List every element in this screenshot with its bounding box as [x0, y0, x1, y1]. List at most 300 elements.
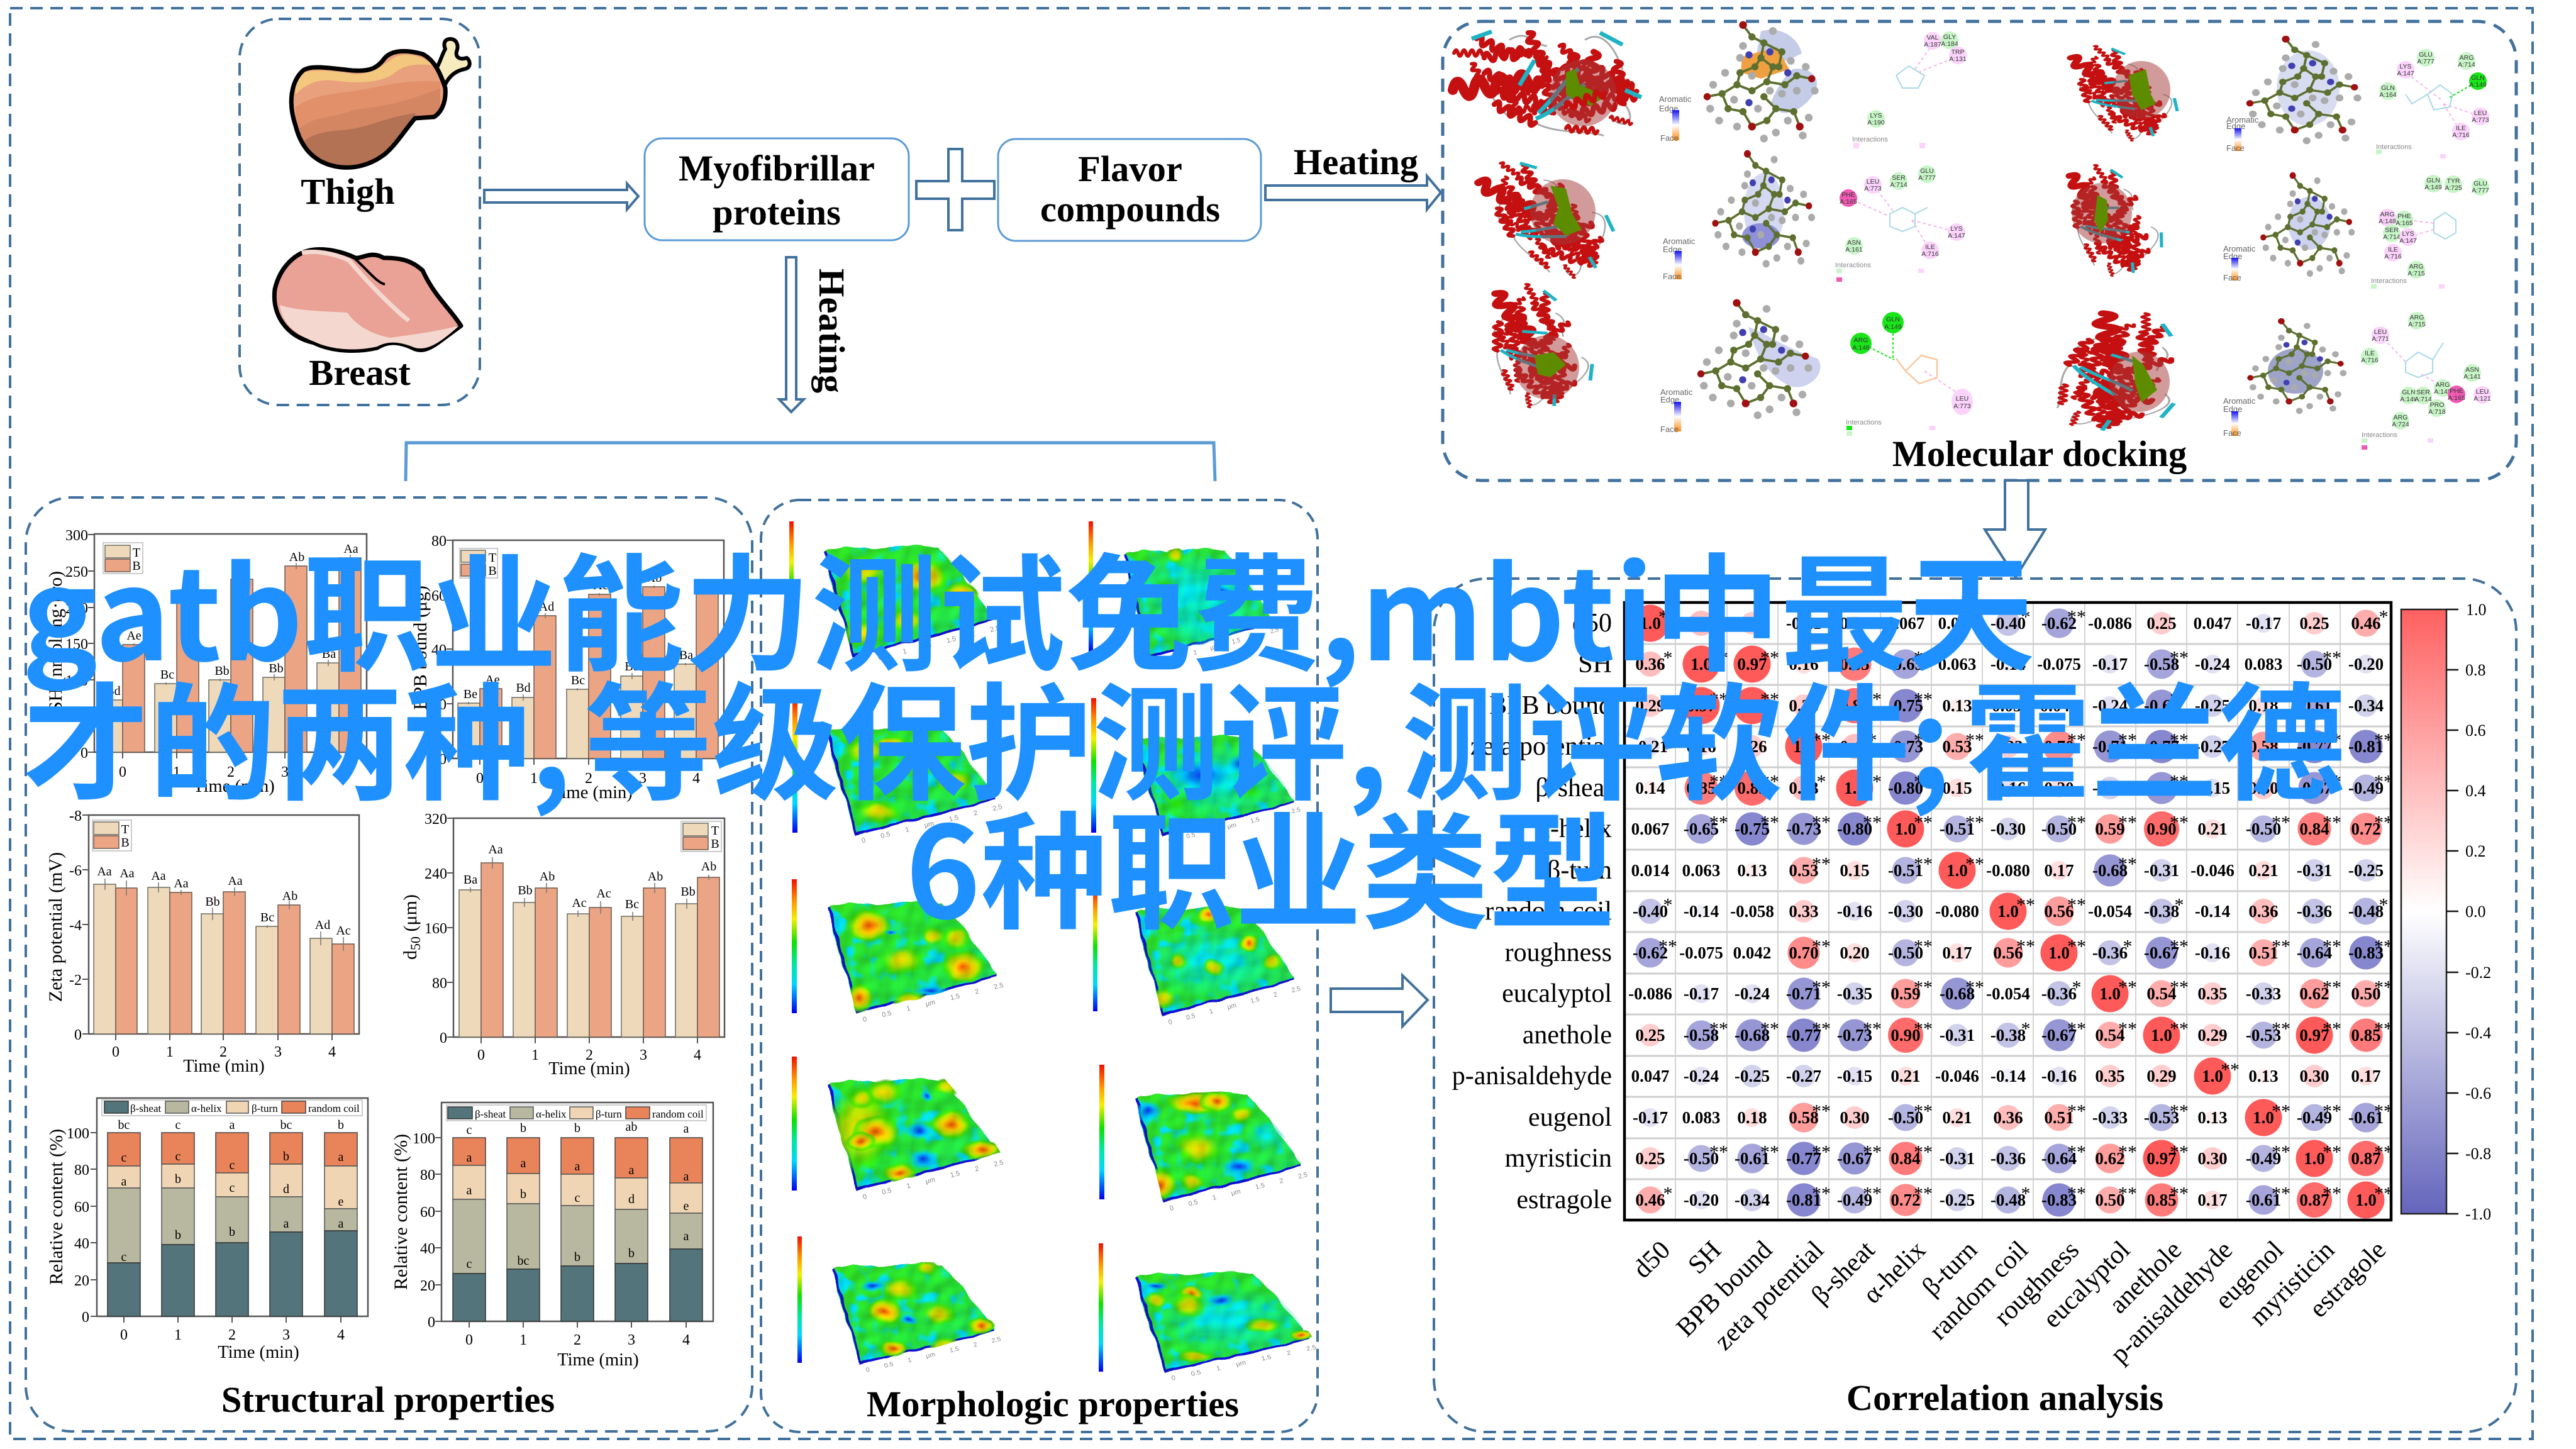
row: myristicin: -0.64 [2041, 1149, 2077, 1168]
chart: secondary structure B: 40 [420, 1241, 435, 1257]
box: flavor compounds: compounds [1040, 189, 1220, 230]
chart: secondary structure T: b [283, 1150, 289, 1163]
chart: BPB bound: B [488, 564, 497, 578]
chart: secondary structure B: a [629, 1163, 635, 1177]
chart: zeta potential [45, 808, 359, 1076]
row: roughness: ** [2170, 936, 2189, 957]
row: myristicin: ** [1760, 1142, 1779, 1162]
row: estragole: -0.34 [1735, 1191, 1770, 1209]
row: roughness: 0.56 [1993, 943, 2023, 962]
row: estragole: ** [2374, 1184, 2393, 1204]
docking complex row 2 left: A:773 [1864, 185, 1882, 192]
row: random coil: -0.48 [2348, 902, 2384, 921]
row: zeta potential: 0.58 [2248, 737, 2279, 756]
row: BPB bound: -0.058 [1986, 696, 2030, 715]
row: zeta potential: -0.77 [2297, 737, 2332, 756]
row: eugenol: eugenol [1528, 1103, 1612, 1132]
chart: secondary structure T: c [121, 1250, 127, 1264]
row: eugenol: ** [2272, 1101, 2290, 1122]
row: eucalyptol: -0.36 [2041, 984, 2077, 1003]
row: random coil: -0.14 [1684, 902, 1719, 921]
docking complex row 3 left: Edge [1660, 395, 1679, 404]
chart: BPB bound: Ae [485, 673, 500, 687]
title: molecular docking: Molecular docking [1892, 433, 2187, 474]
docking complex row 3 right: SER [2416, 389, 2430, 396]
docking complex row 2 right: ARG [2380, 211, 2394, 218]
row: myristicin: 1.0 [2304, 1149, 2325, 1168]
row: BPB bound: 0.042 [2040, 696, 2078, 715]
panel: raw materials [240, 19, 480, 405]
docking complex row 2 right: SER [2385, 226, 2399, 234]
row: roughness: ** [2016, 936, 2035, 957]
docking complex row 3 right: A:771 [2372, 335, 2389, 343]
docking complex row 2 right: GLN [2426, 177, 2440, 184]
row: beta-sheat: ** [2323, 771, 2341, 792]
row: eugenol: 1.0 [2253, 1108, 2274, 1127]
row: anethole: -0.77 [1786, 1026, 1821, 1045]
row: myristicin: ** [2170, 1142, 2189, 1162]
row: alpha-helix: ** [2374, 813, 2393, 833]
row: BPB bound: -0.75 [1888, 696, 1923, 715]
docking complex row 1 right: Face [2226, 143, 2245, 153]
row: estragole: -0.48 [1990, 1191, 2026, 1209]
row: eugenol: ** [2374, 1101, 2393, 1122]
row: alpha-helix: ** [1760, 813, 1779, 833]
label: Heating down: Heating [811, 269, 852, 393]
docking complex row 2 left: ASN [1847, 239, 1861, 247]
row: BPB bound: ** [2323, 689, 2341, 709]
row: eucalyptol: -0.054 [1986, 984, 2030, 1003]
docking complex row 2 right: A:149 [2424, 184, 2442, 191]
chart: zeta potential: 4 [328, 1044, 336, 1060]
row: p-anisaldehyde: p-anisaldehyde [1452, 1062, 1612, 1091]
colorbar: 0.6 [2465, 721, 2485, 740]
chart: SH: 0 [119, 764, 126, 780]
row: alpha-helix: ** [2067, 813, 2086, 833]
docking complex row 2 left: Aromatic [1663, 236, 1696, 246]
row: eucalyptol: 0.59 [1890, 984, 1921, 1003]
row: roughness: 1.0 [2048, 943, 2070, 962]
docking complex row 1 right: A:149 [2469, 81, 2487, 89]
row: d50 [1572, 605, 2389, 641]
row: SH: 0.97 [1737, 655, 1767, 674]
docking complex row 3 left: ARG [1854, 336, 1868, 344]
chart: secondary structure B: e [684, 1199, 689, 1213]
row: alpha-helix: -0.50 [2041, 819, 2077, 838]
row: zeta potential: ** [2323, 730, 2341, 751]
docking complex row 2 right: A:148 [2379, 218, 2396, 225]
row: d50: -0.21 [1786, 614, 1821, 633]
docking complex row 3 right: ILE [2365, 350, 2375, 357]
docking complex row 1 right: A:773 [2472, 116, 2489, 124]
row: anethole: 0.85 [2351, 1026, 2381, 1045]
docking complex row 1 left: Interactions [1852, 136, 1888, 143]
row: d50: 0.047 [2194, 614, 2231, 633]
row: random coil: random coil [1485, 897, 1612, 926]
panel: morphologic properties [761, 500, 1318, 1432]
row: random coil: * [1663, 894, 1673, 916]
row: d50: 0.067 [1887, 614, 1924, 633]
row: BPB bound: ** [1760, 689, 1779, 709]
row: BPB bound [1489, 687, 2384, 724]
row: eucalyptol: ** [1914, 977, 1933, 997]
row: SH: * [1663, 648, 1673, 668]
chart: SH: 300 [65, 528, 88, 544]
icon: breast [274, 250, 461, 351]
row: roughness: ** [2272, 936, 2290, 957]
row: roughness: 0.20 [1840, 943, 1870, 962]
row: estragole: * [2021, 1184, 2030, 1204]
row: SH: 1.0 [1690, 655, 1712, 674]
chart: secondary structure B: 0 [465, 1332, 473, 1348]
chart: zeta potential: Aa [228, 874, 243, 888]
chart: secondary structure B: Time (min) [557, 1350, 639, 1370]
chart: BPB bound: Ac [593, 579, 608, 592]
surface row 2 left: 0 0.5 1 μm 1.5 2 2.5 [861, 803, 1003, 845]
docking complex row 1 right: GLN [2381, 84, 2395, 92]
docking complex row 2 right: A:165 [2396, 219, 2413, 227]
chart: BPB bound: Ab [647, 571, 662, 585]
row: roughness: 0.042 [1733, 943, 1771, 962]
row: alpha-helix: ** [1965, 813, 1984, 833]
row: SH: 0.16 [1789, 655, 1819, 674]
docking complex row 3 right [2051, 311, 2491, 450]
row: estragole: 0.17 [2197, 1191, 2228, 1209]
row: beta-sheat: β-sheat [1535, 774, 1612, 802]
docking complex row 3 right: A:141 [2463, 373, 2481, 380]
row: zeta potential: 1.0 [1793, 737, 1814, 756]
surface row 1 left: 0 0.5 1 μm 1.5 2 2.5 [858, 625, 1001, 667]
row: eucalyptol: 0.50 [2351, 984, 2381, 1003]
chart: BPB bound: 40 [431, 642, 447, 658]
chart: d50: Ab [648, 870, 663, 884]
chart: zeta potential: 1 [166, 1044, 174, 1060]
row: alpha-helix: 0.84 [2299, 819, 2329, 838]
chart: SH: 0 [80, 745, 88, 762]
row: beta-sheat: -0.73 [2144, 779, 2179, 797]
title: structural properties: Structural properties [221, 1379, 555, 1420]
docking complex row 2 left: A:147 [1948, 232, 1965, 240]
chart: d50: 3 [640, 1047, 647, 1063]
docking complex row 2 left: Edge [1663, 245, 1682, 254]
chart: d50: 0 [477, 1047, 485, 1063]
chart: secondary structure B: a [684, 1170, 689, 1184]
docking complex row 3 right: GLN [2402, 389, 2416, 396]
chart: secondary structure T: random coil [308, 1102, 360, 1114]
box: myofibrillar proteins [645, 138, 909, 240]
row: estragole: 0.72 [1890, 1191, 1921, 1209]
chart: d50: 160 [425, 921, 447, 937]
docking complex row 1 right: Aromatic [2226, 115, 2259, 125]
chart: zeta potential: Ad [315, 918, 330, 932]
row: SH: -0.14 [1990, 655, 2026, 674]
row: zeta potential: ** [2272, 730, 2290, 751]
docking complex row 2 left: GLU [1920, 167, 1934, 175]
row: random coil: -0.14 [2195, 902, 2230, 921]
row: SH: -0.17 [2092, 655, 2128, 674]
chart: zeta potential: -8 [69, 808, 82, 824]
row: eugenol: 0.58 [1789, 1108, 1819, 1127]
chart: d50: Ba [464, 873, 477, 887]
row: p-anisaldehyde: 0.35 [2095, 1067, 2125, 1085]
row: d50: 0.25 [2299, 614, 2329, 633]
row: SH: ** [2170, 648, 2189, 668]
row: BPB bound: 0.89 [1840, 696, 1870, 715]
row: estragole: 0.50 [2095, 1191, 2125, 1209]
row: roughness: ** [2323, 936, 2341, 957]
chart: d50: Ab [540, 870, 555, 884]
row: beta-sheat [1535, 770, 2393, 806]
row: BPB bound: 0.26 [1789, 696, 1819, 715]
docking complex row 1 left: TRP [1951, 48, 1965, 56]
docking complex row 1 left: Aromatic [1659, 94, 1692, 104]
row: anethole: 0.29 [2197, 1026, 2228, 1045]
row: eucalyptol: 0.62 [2299, 984, 2329, 1003]
chart: zeta potential: 2 [219, 1044, 227, 1060]
row: estragole: * [1663, 1184, 1673, 1204]
row: roughness: -0.50 [1888, 943, 1923, 962]
column labels: random coil [1924, 1236, 2034, 1346]
chart: secondary structure B: c [467, 1257, 472, 1271]
row: myristicin: ** [1812, 1142, 1831, 1162]
row: d50: 0.25 [2146, 614, 2177, 633]
row: d50: 1.0 [1640, 614, 1661, 633]
row: eucalyptol: -0.35 [1837, 984, 1872, 1003]
row: zeta potential: -0.77 [2144, 737, 2179, 756]
chart: secondary structure T: 0 [120, 1327, 128, 1343]
row: beta-sheat: -0.49 [2348, 779, 2384, 797]
docking complex row 2 left: SER [1892, 174, 1906, 182]
docking complex row 2 right: Face [2223, 273, 2241, 282]
chart: d50: Ab [701, 860, 716, 874]
docking complex row 1 right: Edge [2226, 121, 2245, 131]
docking complex row 1 right: GLU [2419, 51, 2433, 58]
chart: secondary structure B: random coil [652, 1108, 704, 1120]
column labels: anethole [2104, 1236, 2187, 1319]
chart: BPB bound: Time (min) [551, 783, 633, 802]
docking complex row 3 right: A:715 [2408, 321, 2426, 328]
chart: secondary structure T: Time (min) [218, 1343, 299, 1362]
row: SH: -0.58 [2144, 655, 2179, 674]
row: roughness: ** [1914, 936, 1933, 957]
row: alpha-helix: ** [2170, 813, 2189, 833]
docking complex row 2 right: LYS [2402, 230, 2414, 238]
chart: SH: 1 [173, 764, 180, 780]
row: BPB bound: 0.13 [1942, 696, 1972, 715]
colorbar: -0.2 [2465, 963, 2491, 982]
chart: BPB bound: Bc [571, 674, 585, 687]
row: zeta potential: ** [2170, 730, 2189, 751]
row: beta-sheat: -0.16 [1990, 779, 2026, 797]
row: beta-turn: ** [2118, 854, 2137, 874]
docking complex row 2 left: A:161 [1845, 246, 1863, 253]
row: myristicin: 0.30 [2197, 1149, 2228, 1168]
chart: SH: Bb [269, 662, 284, 675]
chart: d50: (μm) [400, 894, 421, 936]
docking complex row 2 right: ILE [2388, 246, 2398, 253]
chart: d50: Ac [572, 896, 587, 910]
row: anethole: -0.38 [1990, 1026, 2026, 1045]
docking complex row 3 right: A:149 [2400, 396, 2418, 403]
docking complex row 1 left: A:187 [1924, 41, 1941, 48]
chart: secondary structure B: Relative content (%) [391, 1134, 411, 1290]
row: beta-sheat: 0.20 [2044, 779, 2074, 797]
row: estragole: -0.61 [2246, 1191, 2281, 1209]
chart: secondary structure T: 2 [228, 1327, 236, 1343]
docking complex row 3 left: A:773 [1953, 402, 1971, 410]
chart: secondary structure T: 3 [282, 1327, 290, 1343]
chart: secondary structure B: 0 [428, 1314, 435, 1331]
column labels: p-anisaldehyde [2105, 1236, 2238, 1369]
chart: SH [45, 528, 367, 796]
row: p-anisaldehyde: -0.27 [1786, 1067, 1821, 1085]
row: estragole: ** [2170, 1184, 2189, 1204]
column labels: SH [1683, 1236, 1727, 1280]
chart: d50: 50 [408, 936, 423, 950]
title: morphologic properties: Morphologic properties [867, 1384, 1239, 1424]
chart: secondary structure T: a [338, 1217, 344, 1231]
row: anethole: -0.53 [2246, 1026, 2281, 1045]
chart: secondary structure B: 100 [413, 1131, 435, 1147]
docking complex row 1 left: VAL [1926, 34, 1939, 42]
row: BPB bound: -0.24 [2092, 696, 2128, 715]
row: SH: ** [1709, 648, 1728, 668]
row: beta-sheat: 0.30 [2248, 779, 2279, 797]
row: zeta potential: 0.33 [1993, 737, 2023, 756]
chart: secondary structure B: a [575, 1160, 580, 1174]
row: random coil: -0.16 [1837, 902, 1872, 921]
row: zeta potential: ** [1812, 730, 1831, 751]
chart: secondary structure T: e [338, 1195, 344, 1209]
chart: secondary structure T: β-turn [252, 1102, 278, 1114]
docking complex row 2 left: A:165 [1840, 198, 1857, 206]
row: anethole: anethole [1523, 1021, 1612, 1050]
row: myristicin: ** [2272, 1142, 2290, 1162]
colorbar: 0.2 [2465, 842, 2485, 860]
docking complex row 1 right [2042, 36, 2489, 158]
chart: secondary structure T: a [230, 1118, 235, 1132]
chart: SH: 250 [65, 564, 88, 580]
chart: secondary structure T: 80 [74, 1162, 89, 1179]
docking complex row 1 right: LYS [2399, 63, 2412, 70]
row: beta-sheat: ** [1760, 771, 1779, 792]
docking complex row 2 left: A:777 [1918, 174, 1936, 182]
row: eucalyptol: ** [1965, 977, 1984, 997]
chart: BPB bound: 2 [585, 770, 592, 787]
chart: secondary structure B: b [628, 1246, 635, 1260]
row: p-anisaldehyde: -0.16 [2041, 1067, 2077, 1085]
docking complex row 1 right: LEU [2474, 109, 2487, 117]
row: beta-turn: ** [1812, 854, 1831, 874]
row: eucalyptol: ** [2118, 977, 2137, 997]
row: beta-turn: -0.51 [1888, 861, 1923, 880]
row: eugenol: -0.17 [1633, 1108, 1668, 1127]
docking complex row 3 right: A:718 [2428, 408, 2446, 416]
surface row 4 right [1099, 1065, 1308, 1213]
surface row 3 left: 0 0.5 1 μm 1.5 2 2.5 [862, 982, 1004, 1024]
row: zeta potential: -0.73 [1888, 737, 1923, 756]
row: BPB bound: -0.68 [2144, 696, 2179, 715]
row: eugenol: 0.36 [1993, 1108, 2023, 1127]
docking complex row 3 left: LEU [1956, 395, 1968, 402]
chart: secondary structure T: β-sheat [130, 1102, 162, 1114]
column labels: α-helix [1858, 1236, 1931, 1309]
surface row 5 right [1099, 1243, 1317, 1382]
chart: SH: T [133, 546, 140, 560]
row: alpha-helix: ** [1914, 813, 1933, 833]
chart: secondary structure B: a [684, 1122, 689, 1136]
row: BPB bound: ** [2170, 689, 2189, 709]
chart: BPB bound: Ad [539, 600, 554, 614]
row: estragole: 0.85 [2146, 1191, 2177, 1209]
chart: secondary structure T: c [121, 1151, 127, 1165]
row: anethole: -0.73 [1837, 1026, 1872, 1045]
row: beta-sheat: 0.14 [1635, 779, 1665, 797]
arrow: docking to correlation [1985, 480, 2045, 577]
panel: molecular docking [1443, 21, 2516, 480]
chart: SH: B [132, 559, 141, 573]
row: d50: d50 [1572, 609, 1612, 638]
row: beta-turn: -0.68 [2092, 861, 2128, 880]
chart: zeta potential: -2 [69, 972, 82, 989]
row: beta-sheat: 0.85 [1686, 779, 1716, 797]
chart: d50: Time (min) [548, 1059, 630, 1079]
row: zeta potential: * [1868, 730, 1877, 751]
colorbar: -0.8 [2465, 1145, 2491, 1163]
colorbar [2401, 601, 2491, 1223]
row: eugenol: -0.53 [2144, 1108, 2179, 1127]
row: myristicin: 0.97 [2146, 1149, 2177, 1168]
docking complex row 2 right: A:716 [2384, 253, 2402, 260]
row: eugenol: -0.33 [2092, 1108, 2128, 1127]
label: Breast: Breast [309, 352, 411, 393]
row: p-anisaldehyde: -0.24 [1684, 1067, 1719, 1085]
row: roughness: -0.075 [1679, 943, 1723, 962]
chart: secondary structure T: b [175, 1172, 181, 1186]
chart: secondary structure B: a [467, 1151, 472, 1165]
docking complex row 1 right: ARG [2460, 54, 2473, 62]
overlay headline: 6种职业类型 [906, 772, 1616, 955]
chart: zeta potential: Ab [282, 889, 297, 903]
row: SH: ** [1760, 648, 1779, 668]
row: anethole [1523, 1016, 2393, 1054]
chart: d50: Bb [518, 884, 533, 897]
row: SH: 0.063 [1938, 655, 1976, 674]
row: p-anisaldehyde: -0.14 [1990, 1067, 2026, 1085]
column labels: d50 [1628, 1236, 1676, 1284]
row: alpha-helix: 0.90 [2146, 819, 2177, 838]
row: BPB bound: 1.0 [1741, 696, 1763, 715]
chart: secondary structure T: Relative content (%) [46, 1129, 67, 1285]
row: SH: ** [1863, 648, 1882, 668]
row: beta-sheat: ** [2374, 771, 2393, 792]
row: SH: ** [1914, 648, 1933, 668]
arrow: morphologic to correlation [1331, 975, 1428, 1026]
chart: secondary structure T: c [230, 1181, 235, 1195]
docking complex row 1 left [1452, 21, 1967, 148]
row: SH: -0.65 [1888, 655, 1923, 674]
chart: BPB bound: 0 [476, 770, 484, 787]
row: roughness: -0.64 [2297, 943, 2332, 962]
row: random coil: -0.054 [2088, 902, 2132, 921]
docking complex row 3 right: Edge [2223, 404, 2242, 414]
docking complex row 3 right: Face [2223, 428, 2241, 438]
row: SH: -0.075 [2037, 655, 2081, 674]
chart: zeta potential: -6 [69, 863, 82, 879]
docking complex row 3 left: A:148 [1852, 344, 1870, 352]
row: estragole: 0.46 [1635, 1191, 1665, 1209]
chart: zeta potential: 0 [112, 1044, 119, 1060]
